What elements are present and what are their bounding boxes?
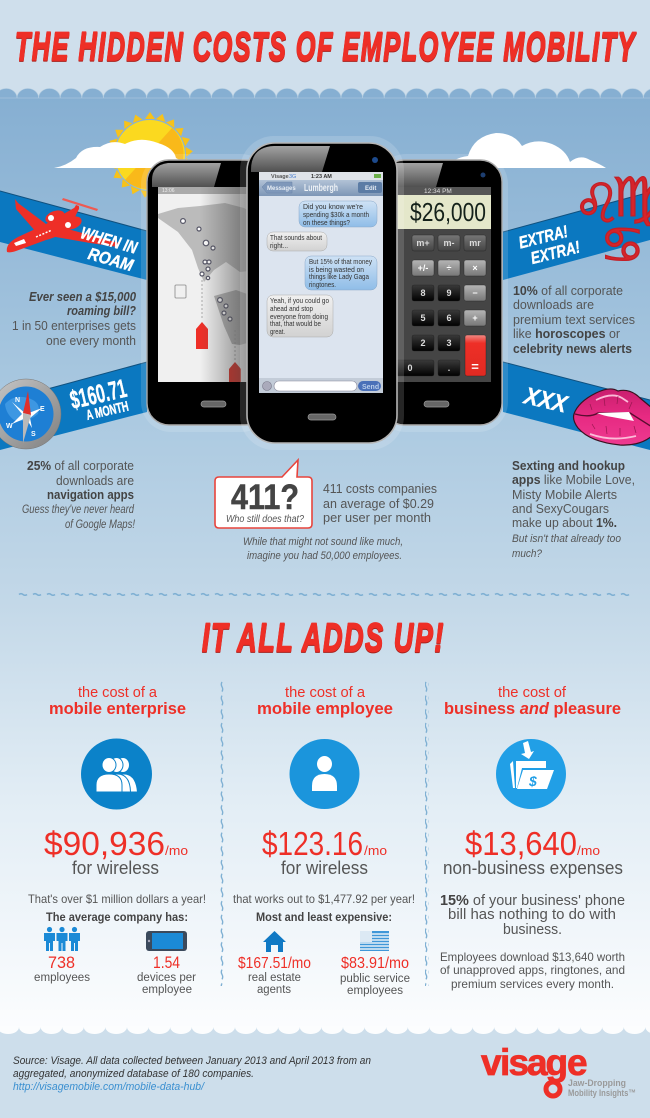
text block: unapproved downloads <box>440 950 625 991</box>
wavy divider <box>16 592 630 596</box>
icon: three people <box>44 927 80 951</box>
text block: roaming bill: one every month <box>46 333 136 348</box>
stat: 1.54 devices: 1.54 <box>153 953 180 972</box>
stat: $13,640 <box>443 825 623 878</box>
text block: sexting apps <box>512 458 635 560</box>
text block: premium text services <box>513 283 635 356</box>
calculator screen <box>390 187 491 382</box>
chat bubble 1: on these things? <box>303 218 350 227</box>
text block: 15 percent: bill has nothing to do with <box>448 906 616 923</box>
column heading <box>257 684 393 718</box>
text block: premium text services: premium text services <box>513 312 635 327</box>
column heading <box>444 684 621 718</box>
calculator screen: mr <box>469 238 481 248</box>
text block: premium text services: 10% of all corporate <box>513 283 623 298</box>
stat: $90,936: $90,936 <box>44 825 165 862</box>
messaging screen: Visage <box>271 174 289 180</box>
stat: $90,936: /mo <box>165 843 188 858</box>
messaging screen <box>259 172 383 393</box>
stat: $90,936: for wireless <box>72 858 159 878</box>
chat bubble 3 <box>305 256 377 290</box>
calculator screen: + <box>472 313 478 323</box>
chat bubble 2: That sounds about <box>270 233 322 242</box>
text block: sexting apps: Misty Mobile Alerts <box>512 487 617 502</box>
text block: roaming bill: roaming bill? <box>67 303 136 318</box>
stat: $83.91 public service: public service <box>340 973 410 985</box>
icon: compass: N <box>15 397 20 404</box>
footer band <box>0 1027 650 1118</box>
logo: visage <box>481 1042 636 1099</box>
column heading: the cost of a <box>78 684 158 701</box>
icon: zodiac glyphs <box>573 166 650 274</box>
panel: mobile employee <box>233 684 415 997</box>
map screen <box>158 187 258 382</box>
calculator screen: m+ <box>416 238 430 248</box>
text block: 411 costs: imagine you had 50,000 employees. <box>247 550 402 562</box>
stat: $123.16: /mo <box>364 843 387 858</box>
text block: roaming bill: Ever seen a $15,000 <box>29 289 137 304</box>
icon: red airplane <box>7 198 119 252</box>
icon: sun <box>107 112 193 198</box>
speaker <box>308 414 336 420</box>
text block: 15 percent <box>440 892 625 938</box>
icon: folder with dollar: $ <box>528 773 537 789</box>
icon: folder with dollar <box>496 739 566 809</box>
message input bar: Send <box>362 384 379 391</box>
text block <box>28 892 206 924</box>
text block: unapproved downloads: Employees download $13,640 worth <box>440 950 625 964</box>
stat: $83.91 public service: employees <box>347 985 403 997</box>
ribbon label: extra extra: EXTRA! <box>517 222 570 252</box>
speaker <box>424 401 449 407</box>
callout: 411 speech bubble <box>215 460 312 528</box>
phone: map screen (left) <box>141 154 271 432</box>
column heading: mobile enterprise <box>49 699 186 718</box>
source text: http://visagemobile.com/mobile-data-hub/ <box>13 1081 205 1093</box>
logo: visage: Mobility Insights™ <box>568 1088 636 1099</box>
wavy column divider 2 <box>425 680 429 986</box>
callout: 411 speech bubble: 411? <box>231 478 299 517</box>
ribbon: extra extra <box>503 166 650 280</box>
ribbon label: xxx: XXX <box>520 382 571 419</box>
icon: compass <box>0 379 61 449</box>
ribbon label: $160.71 a month: A MONTH <box>84 398 130 423</box>
logo: visage: visage <box>481 1042 588 1083</box>
panel: mobile enterprise <box>28 684 206 996</box>
stat: $90,936 <box>44 825 188 878</box>
ribbon: xxx <box>503 362 650 450</box>
icon: zodiac glyphs: ♋ <box>600 216 645 274</box>
text block: sexting apps: much? <box>512 548 543 560</box>
chat bubble 4: everyone from doing <box>270 312 328 321</box>
icon: red price tag <box>196 322 208 349</box>
column heading: mobile employee <box>257 699 393 718</box>
text block: premium text services: celebrity news alerts <box>513 341 632 356</box>
ribbon: when in roam <box>0 191 147 280</box>
calculator screen: = <box>471 359 479 374</box>
icon: compass: W <box>6 423 13 430</box>
text block: 411 costs: 411 costs companies <box>323 481 437 496</box>
calculator screen: 8 <box>420 288 426 298</box>
text block: unapproved downloads: premium services every month. <box>451 977 614 991</box>
top scalloped edge <box>0 88 650 98</box>
calculator screen: m- <box>444 238 455 248</box>
chat bubble 4: that, that would be <box>270 319 321 328</box>
calculator screen: − <box>472 288 478 298</box>
calculator screen: × <box>472 263 478 273</box>
icon: right cloud <box>448 133 606 168</box>
source text: Source: Visage. All data collected between January 2013 and April 2013 from an <box>13 1055 371 1067</box>
ribbon label: $160.71 a month: $160.71 <box>67 373 129 415</box>
column heading: the cost of <box>498 684 567 701</box>
phone: text messages (centre) <box>240 136 404 450</box>
text block: sexting apps: apps like Mobile Love, <box>512 472 635 487</box>
camera <box>372 157 378 163</box>
stat: $13,640: /mo <box>577 843 600 858</box>
messaging screen: 1:23 AM <box>311 174 332 180</box>
stat: $123.16 <box>262 825 387 878</box>
calculator screen: 5 <box>420 313 426 323</box>
text block: sexting apps: make up about 1%. <box>512 515 617 530</box>
stat: 738 employees: employees <box>34 972 90 984</box>
column heading: the cost of a <box>285 684 366 701</box>
text block: premium text services: downloads are <box>513 297 594 312</box>
text block: The average company has: <box>46 910 188 924</box>
column heading: business and pleasure <box>444 699 621 718</box>
stat: $83.91 public service: $83.91/mo <box>341 955 409 972</box>
stat: $167.51 real estate: $167.51/mo <box>238 955 311 972</box>
text block: 411 costs: per user per month <box>323 510 431 525</box>
chat bubble 4: great. <box>270 327 285 336</box>
logo: visage: Jaw-Dropping <box>568 1078 626 1089</box>
text block: navigation apps: downloads are <box>56 473 134 488</box>
text block: navigation apps: Guess they've never heard <box>22 504 134 516</box>
chat bubble 3: is being wasted on <box>309 265 364 274</box>
ribbon label: when in roam <box>73 223 141 275</box>
icon: zodiac glyphs: ♌ <box>573 172 621 235</box>
ribbon label: when in roam: WHEN IN <box>78 223 140 258</box>
chat bubble 1 <box>299 201 377 227</box>
icon: house <box>263 931 286 952</box>
text block: roaming bill <box>12 289 137 348</box>
phone: calculator screen (right) <box>376 154 508 432</box>
calculator screen: +/- <box>418 263 428 273</box>
message input bar <box>259 378 383 393</box>
source text: aggregated, anonymized database of 180 companies. <box>13 1068 254 1080</box>
text block: sexting apps: But isn't that already too <box>512 533 621 545</box>
chat bubble 2: right... <box>270 241 288 250</box>
icon: pink lips <box>574 389 650 445</box>
calculator screen: 6 <box>446 313 452 323</box>
icon: compass: E <box>40 406 45 413</box>
chat bubble 3: But 15% of that money <box>309 257 372 266</box>
text block: Most and least expensive: <box>256 910 392 924</box>
stat: $13,640: non-business expenses <box>443 858 623 878</box>
text block: premium text services: like horoscopes or <box>513 326 621 341</box>
footer scalloped edge <box>0 1026 650 1034</box>
chat bubble 3: things like Lady Gaga <box>309 272 370 281</box>
text block: navigation apps <box>22 458 136 531</box>
text block: That's over $1 million dollars a year! <box>28 892 206 906</box>
ribbon label: extra extra <box>517 220 582 270</box>
chat bubble 3: ringtones. <box>309 280 336 289</box>
icon: group of people <box>81 738 152 810</box>
wavy column divider 1 <box>220 680 224 986</box>
text block: that works out to $1,477.92 per year! <box>233 892 415 906</box>
stat: 738 employees <box>34 953 90 984</box>
text block: 15 percent: 15% of your business' phone <box>440 892 625 909</box>
stat: $167.51 real estate <box>238 955 311 996</box>
text block: navigation apps: navigation apps <box>47 487 134 502</box>
text block: 15 percent: business. <box>503 921 562 938</box>
ribbon label: extra extra: EXTRA! <box>529 237 582 268</box>
stat: $123.16: $123.16 <box>262 825 363 862</box>
text block: sexting apps: Sexting and hookup <box>512 458 625 473</box>
text block: navigation apps: of Google Maps! <box>65 519 136 531</box>
stat: 738 employees: 738 <box>48 953 75 972</box>
messaging screen: Edit <box>365 186 376 192</box>
messaging screen: 3G <box>289 174 296 180</box>
text block: 411 costs: an average of $0.29 <box>323 496 434 511</box>
text block: 411 costs <box>243 481 437 562</box>
panel: business and pleasure <box>440 684 625 991</box>
calculator screen: 0 <box>407 363 413 373</box>
icon: single person <box>290 739 360 809</box>
ribbon label: $160.71 a month <box>67 373 132 426</box>
calculator screen: 2 <box>420 338 426 348</box>
chat bubble 1: spending $30k a month <box>303 210 369 219</box>
icon: left cloud <box>54 140 185 168</box>
icon: flag <box>360 931 389 951</box>
stat: 1.54 devices <box>137 953 196 996</box>
calculator screen: 9 <box>446 288 452 298</box>
calculator screen: 12:34 PM <box>424 188 452 195</box>
chat bubble 4 <box>267 295 333 337</box>
text block: 411 costs: While that might not sound like much, <box>243 536 403 548</box>
stat: 1.54 devices: employee <box>142 984 192 996</box>
chat bubble 4: Yeah, if you could go <box>270 296 329 305</box>
text block: navigation apps: 25% of all corporate <box>27 458 134 473</box>
calculator display amount: $26,000 <box>410 197 486 227</box>
chat bubble 2 <box>267 232 327 251</box>
stat: $123.16: for wireless <box>281 858 368 878</box>
chat bubble 4: ahead and stop <box>270 304 313 313</box>
stat: $167.51 real estate: real estate <box>248 972 301 984</box>
calculator screen: 3 <box>446 338 452 348</box>
heading: it all adds up: IT ALL ADDS UP! <box>202 616 445 660</box>
messaging screen: Lumbergh <box>304 183 338 194</box>
map screen: 13:06 <box>162 188 175 194</box>
ribbon label: when in roam: ROAM <box>86 244 136 275</box>
text block: unapproved downloads: of unapproved apps, ringtones, and <box>440 963 625 977</box>
stat: $13,640: $13,640 <box>465 825 577 862</box>
icon: compass: S <box>31 431 36 438</box>
top title band <box>0 0 650 97</box>
stat: 1.54 devices: devices per <box>137 972 196 984</box>
calculator screen: . <box>448 363 450 373</box>
ribbon: navigation cost <box>0 362 147 450</box>
chat bubble 1: Did you know we're <box>303 202 363 211</box>
text block: sexting apps: and SexyCougars <box>512 501 609 516</box>
stat: $83.91 public service <box>340 955 410 997</box>
column heading <box>49 684 186 718</box>
messaging screen: Messages <box>267 186 296 192</box>
calculator screen: ÷ <box>447 263 452 273</box>
camera <box>480 172 486 178</box>
source text <box>13 1055 371 1093</box>
text block: roaming bill: 1 in 50 enterprises gets <box>12 318 136 333</box>
stat: $167.51 real estate: agents <box>257 984 291 996</box>
callout: 411 speech bubble: Who still does that? <box>226 514 304 525</box>
icon: smartphone sideways <box>146 931 187 951</box>
icon: red price tag lower <box>229 362 241 382</box>
speaker <box>201 401 226 407</box>
text block <box>233 892 415 924</box>
